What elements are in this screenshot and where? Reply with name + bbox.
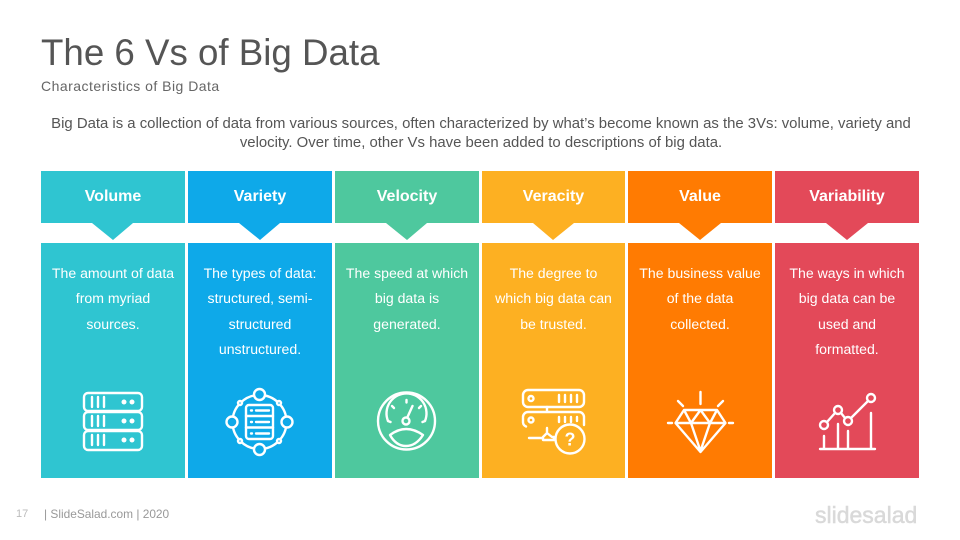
text: variability: big data can be <box>799 290 895 306</box>
arrow: veracity <box>533 223 574 240</box>
text: variety: The types of data: <box>204 265 316 281</box>
icon: speedometer <box>376 391 436 451</box>
icon: diamond <box>666 390 734 454</box>
heading: variety: Variety <box>234 188 286 205</box>
logo: slidesalad <box>815 502 917 528</box>
text: veracity: which big data can <box>495 290 612 306</box>
page number: 17 <box>16 508 28 520</box>
text: variability: formatted. <box>815 341 879 357</box>
text: velocity <box>346 265 468 332</box>
text: variety <box>204 265 316 357</box>
arrow: variability <box>826 223 868 240</box>
text: variability: The ways in which <box>789 265 905 281</box>
body: veracity <box>482 243 625 478</box>
heading: veracity: Veracity <box>523 188 584 205</box>
heading: volume: Volume <box>85 188 141 205</box>
intro text <box>51 116 911 151</box>
panel: volume <box>41 171 185 478</box>
panel: velocity <box>335 171 479 478</box>
panel: value <box>628 171 772 478</box>
heading: velocity <box>335 171 479 223</box>
icon: server question <box>522 388 586 455</box>
heading: variability <box>775 171 919 223</box>
icon: server stack <box>82 392 144 452</box>
heading: variety <box>188 171 332 223</box>
body: variety <box>188 243 332 478</box>
body: value <box>628 243 772 478</box>
title: The 6 Vs of Big Data <box>41 32 380 73</box>
text: volume <box>52 265 174 332</box>
arrow: variety <box>239 223 280 240</box>
heading: value <box>628 171 772 223</box>
heading: veracity <box>482 171 625 223</box>
text: veracity: The degree to <box>510 265 597 281</box>
icon: line and bar chart <box>818 392 876 450</box>
arrow: velocity <box>386 223 427 240</box>
text: value: collected. <box>670 316 730 332</box>
text: velocity: generated. <box>373 316 441 332</box>
text: variety: structured, semi- <box>208 290 312 306</box>
text: veracity: be trusted. <box>520 316 587 332</box>
body: velocity <box>335 243 479 478</box>
text: velocity: The speed at which <box>346 265 468 281</box>
intro text: Big Data is a collection of data from various sources, often characterized by what’s become known as the 3Vs: volume, variety and <box>51 116 911 132</box>
text: variety: structured <box>229 316 291 332</box>
icon: server question: ? <box>564 430 576 450</box>
heading: volume <box>41 171 185 223</box>
text: volume: from myriad <box>76 290 150 306</box>
icon: network data <box>225 388 294 456</box>
text: variety: unstructured. <box>219 341 301 357</box>
text: volume: The amount of data <box>52 265 174 281</box>
body: volume <box>41 243 185 478</box>
panel: variety <box>188 171 332 478</box>
subtitle: Characteristics of Big Data <box>41 78 220 94</box>
heading: value: Value <box>679 188 721 205</box>
body: variability <box>775 243 919 478</box>
text: value <box>639 265 761 332</box>
panel: variability <box>775 171 919 478</box>
intro text: velocity. Over time, other Vs have been added to descriptions of big data. <box>240 135 722 151</box>
text: variability: used and <box>818 316 876 332</box>
footer text: | SlideSalad.com | 2020 <box>44 507 169 521</box>
arrow: value <box>679 223 721 240</box>
arrow: volume <box>92 223 133 240</box>
text: volume: sources. <box>86 316 140 332</box>
text: variability <box>789 265 905 357</box>
heading: velocity: Velocity <box>377 188 437 205</box>
heading: variability: Variability <box>809 188 885 205</box>
text: value: The business value <box>639 265 761 281</box>
text: velocity: big data is <box>375 290 439 306</box>
text: value: of the data <box>667 290 733 306</box>
text: veracity <box>495 265 612 332</box>
panel: veracity <box>482 171 625 478</box>
